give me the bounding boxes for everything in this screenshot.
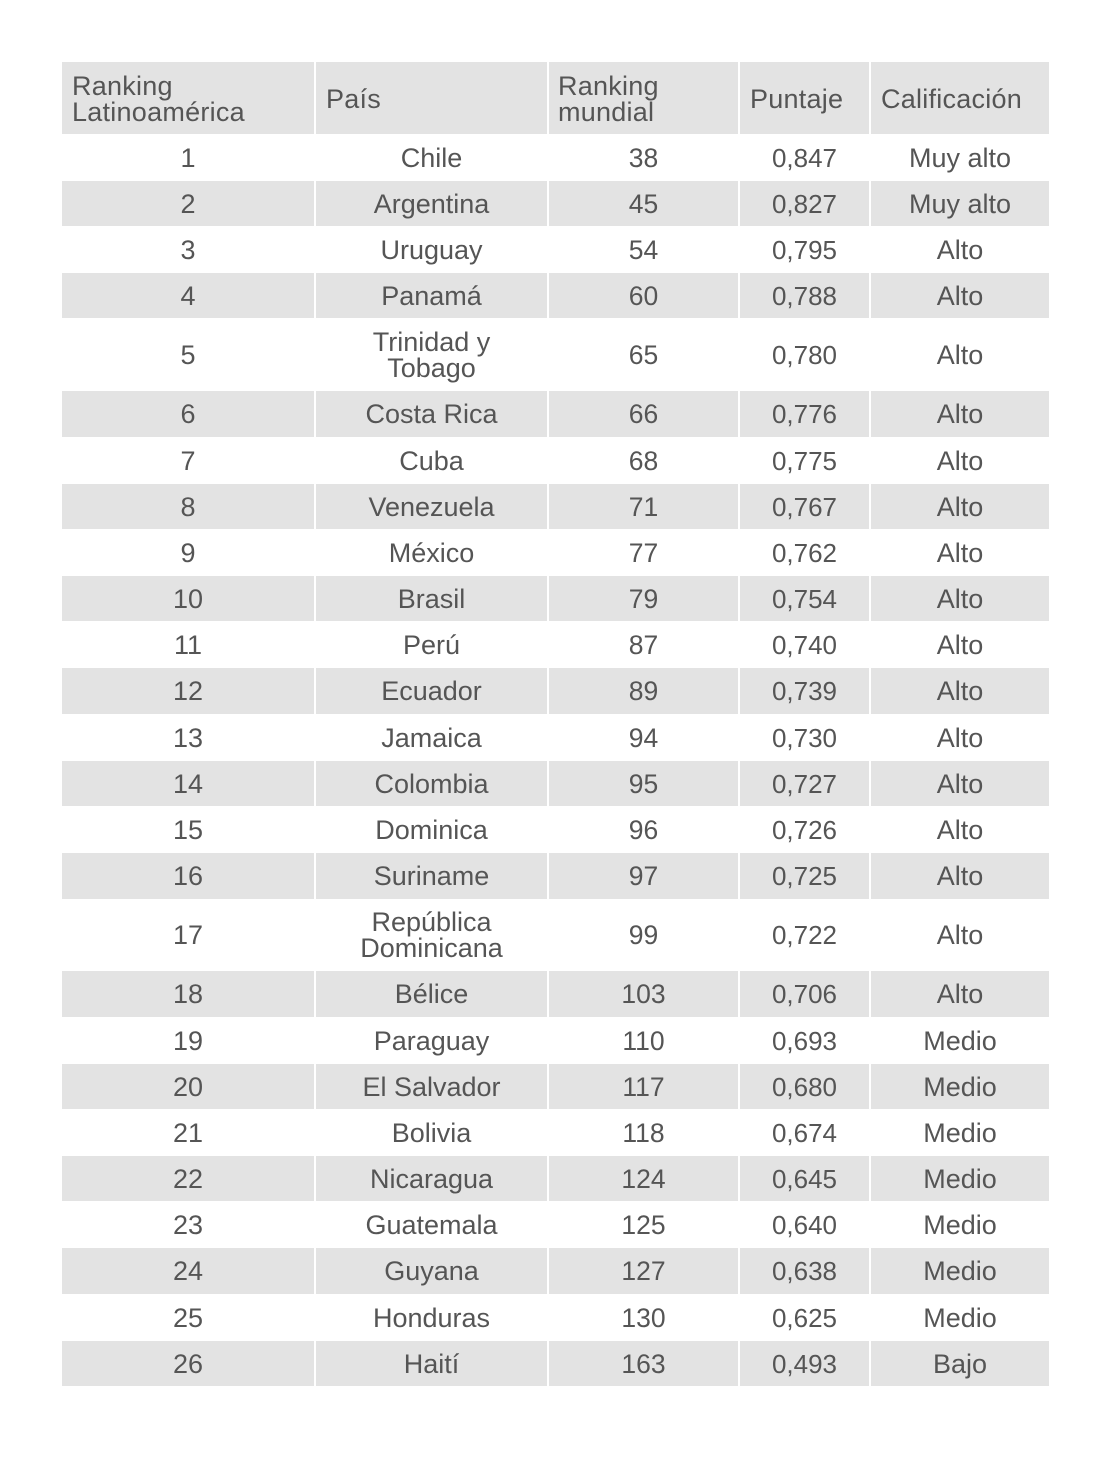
row 11: Perú: 0,740 (772, 630, 837, 660)
row 5: Trinidad y Tobago: 5 (180, 340, 196, 370)
row 22: Nicaragua (62, 1156, 1049, 1201)
row 18: Bélice: 0,706 (772, 979, 837, 1009)
row 20: El Salvador: 0,680 (772, 1072, 837, 1102)
row 9: México: 9 (180, 538, 196, 568)
row 18: Bélice: Bélice (395, 979, 468, 1009)
row 11: Perú: Alto (937, 630, 983, 660)
row 1: Chile: 0,847 (772, 143, 837, 173)
row 7: Cuba: Alto (937, 446, 983, 476)
row 11: Perú: 11 (174, 630, 202, 660)
row 6: Costa Rica: 0,776 (772, 399, 837, 429)
row 3: Uruguay: Alto (937, 235, 983, 265)
row 23: Guatemala: Guatemala (365, 1210, 498, 1240)
row 14: Colombia (62, 761, 1049, 806)
row 2: Argentina: Argentina (374, 188, 489, 218)
row 8: Venezuela: 0,767 (772, 492, 837, 522)
row 3: Uruguay (180, 235, 983, 265)
row 14: Colombia: 95 (629, 768, 658, 798)
row 15: Dominica: 0,726 (772, 814, 837, 844)
row 7: Cuba: 0,775 (772, 446, 837, 476)
row 24: Guyana: 127 (621, 1256, 666, 1286)
header row: Puntaje (750, 84, 843, 114)
row 17: República Dominicana: 0,722 (772, 920, 837, 950)
row 3: Uruguay: 3 (180, 235, 196, 265)
row 22: Nicaragua: Nicaragua (370, 1164, 493, 1194)
row 25: Honduras (173, 1302, 997, 1332)
row 7: Cuba: 7 (180, 446, 196, 476)
row 16: Suriname: Alto (937, 861, 983, 891)
row 25: Honduras: 130 (621, 1302, 666, 1332)
row 24: Guyana: Guyana (384, 1256, 479, 1286)
row 21: Bolivia: Medio (923, 1118, 997, 1148)
row 5: Trinidad y Tobago (180, 327, 983, 383)
row 17: República Dominicana: 17 (173, 920, 203, 950)
row 11: Perú: Perú (403, 630, 460, 660)
row 13: Jamaica: 0,730 (772, 722, 837, 752)
row 13: Jamaica: 94 (629, 722, 658, 752)
row 12: Ecuador: 89 (629, 676, 658, 706)
row 21: Bolivia: Bolivia (392, 1118, 471, 1148)
header row: Calificación (881, 84, 1022, 114)
row 25: Honduras: 25 (173, 1302, 203, 1332)
row 25: Honduras: Honduras (373, 1302, 490, 1332)
row 4: Panamá: 60 (629, 280, 658, 310)
row 4: Panamá: 0,788 (772, 280, 837, 310)
row 24: Guyana (62, 1248, 1049, 1294)
row 7: Cuba (180, 446, 983, 476)
row 3: Uruguay: Uruguay (380, 235, 483, 265)
row 2: Argentina: 0,827 (772, 188, 837, 218)
row 17: República Dominicana: 99 (629, 920, 658, 950)
row 6: Costa Rica: 66 (629, 399, 658, 429)
row 20: El Salvador: 117 (622, 1072, 665, 1102)
row 26: Haití: Bajo (933, 1348, 987, 1378)
row 9: México (180, 538, 983, 568)
row 20: El Salvador: Medio (923, 1072, 997, 1102)
row 1: Chile: Muy alto (909, 143, 1011, 173)
row 1: Chile (180, 143, 1011, 173)
row 5: Trinidad y Tobago: Alto (937, 340, 983, 370)
row 5: Trinidad y Tobago: 65 (629, 340, 658, 370)
row 7: Cuba: Cuba (399, 446, 464, 476)
row 23: Guatemala: 23 (173, 1210, 203, 1240)
row 24: Guyana: 0,638 (772, 1256, 837, 1286)
row 23: Guatemala: 0,640 (772, 1210, 837, 1240)
row 16: Suriname: Suriname (374, 861, 489, 891)
header row: Ranking (558, 70, 659, 100)
row 25: Honduras: Medio (923, 1302, 997, 1332)
row 9: México: México (389, 538, 474, 568)
row 26: Haití: 26 (173, 1348, 203, 1378)
row 6: Costa Rica: Alto (937, 399, 983, 429)
row 1: Chile: Chile (401, 143, 462, 173)
header row (62, 62, 1049, 134)
row 14: Colombia: 14 (173, 768, 203, 798)
row 15: Dominica: Alto (937, 814, 983, 844)
row 6: Costa Rica (62, 391, 1049, 437)
row 1: Chile: 1 (180, 143, 196, 173)
row 15: Dominica: 96 (629, 814, 658, 844)
header row: País (326, 84, 381, 114)
row 10: Brasil: 79 (629, 584, 658, 614)
row 3: Uruguay: 0,795 (772, 235, 837, 265)
header row: Latinoamérica (72, 96, 245, 126)
row 16: Suriname: 0,725 (772, 861, 837, 891)
row 10: Brasil: Brasil (398, 584, 465, 614)
row 5: Trinidad y Tobago: Trinidad y (373, 327, 490, 357)
row 13: Jamaica (173, 722, 983, 752)
row 17: República Dominicana: Alto (937, 920, 983, 950)
row 16: Suriname: 97 (629, 861, 658, 891)
row 14: Colombia: Alto (937, 768, 983, 798)
row 2: Argentina: 45 (629, 188, 658, 218)
header row: mundial (558, 96, 654, 126)
row 8: Venezuela: Venezuela (368, 492, 495, 522)
row 19: Paraguay: Paraguay (374, 1026, 489, 1056)
row 23: Guatemala (173, 1210, 997, 1240)
row 19: Paraguay: 0,693 (772, 1026, 837, 1056)
row 19: Paraguay (173, 1026, 997, 1056)
row 16: Suriname: 16 (173, 861, 203, 891)
row 11: Perú (174, 630, 983, 660)
row 25: Honduras: 0,625 (772, 1302, 837, 1332)
row 18: Bélice: Alto (937, 979, 983, 1009)
row 22: Nicaragua: 0,645 (772, 1164, 837, 1194)
row 20: El Salvador (62, 1064, 1049, 1109)
row 13: Jamaica: Alto (937, 722, 983, 752)
row 12: Ecuador: 12 (173, 676, 203, 706)
row 8: Venezuela: 71 (629, 492, 658, 522)
row 14: Colombia: Colombia (374, 768, 489, 798)
row 12: Ecuador (62, 668, 1049, 714)
row 22: Nicaragua: 22 (173, 1164, 203, 1194)
row 26: Haití: 163 (621, 1348, 666, 1378)
row 10: Brasil: Alto (937, 584, 983, 614)
row 20: El Salvador: 20 (173, 1072, 203, 1102)
row 19: Paraguay: 110 (622, 1026, 665, 1056)
row 26: Haití: Haití (404, 1348, 459, 1378)
row 18: Bélice: 18 (173, 979, 203, 1009)
row 5: Trinidad y Tobago: 0,780 (772, 340, 837, 370)
row 21: Bolivia (173, 1118, 997, 1148)
row 2: Argentina: Muy alto (909, 188, 1011, 218)
row 9: México: 77 (629, 538, 658, 568)
row 17: República Dominicana: República (371, 907, 492, 937)
row 15: Dominica: 15 (173, 814, 203, 844)
row 8: Venezuela: 8 (180, 492, 196, 522)
row 10: Brasil: 10 (173, 584, 203, 614)
row 24: Guyana: Medio (923, 1256, 997, 1286)
row 8: Venezuela (62, 484, 1049, 529)
row 16: Suriname (62, 853, 1049, 899)
row 1: Chile: 38 (629, 143, 658, 173)
row 4: Panamá (62, 273, 1049, 318)
row 15: Dominica (173, 814, 983, 844)
row 19: Paraguay: 19 (173, 1026, 203, 1056)
row 21: Bolivia: 21 (173, 1118, 203, 1148)
row 14: Colombia: 0,727 (772, 768, 837, 798)
row 26: Haití (62, 1341, 1049, 1386)
row 4: Panamá: Panamá (381, 280, 482, 310)
row 9: México: Alto (937, 538, 983, 568)
row 6: Costa Rica: 6 (180, 399, 196, 429)
row 4: Panamá: Alto (937, 280, 983, 310)
row 9: México: 0,762 (772, 538, 837, 568)
row 23: Guatemala: 125 (621, 1210, 666, 1240)
row 22: Nicaragua: 124 (621, 1164, 666, 1194)
row 17: República Dominicana: Dominicana (360, 933, 503, 963)
row 2: Argentina (62, 181, 1049, 226)
row 3: Uruguay: 54 (629, 235, 658, 265)
row 22: Nicaragua: Medio (923, 1164, 997, 1194)
row 12: Ecuador: Alto (937, 676, 983, 706)
row 17: República Dominicana (173, 907, 983, 963)
row 11: Perú: 87 (629, 630, 658, 660)
row 24: Guyana: 24 (173, 1256, 203, 1286)
row 21: Bolivia: 118 (622, 1118, 665, 1148)
row 6: Costa Rica: Costa Rica (365, 399, 498, 429)
row 7: Cuba: 68 (629, 446, 658, 476)
row 26: Haití: 0,493 (772, 1348, 837, 1378)
row 8: Venezuela: Alto (937, 492, 983, 522)
row 18: Bélice (62, 971, 1049, 1017)
row 18: Bélice: 103 (621, 979, 666, 1009)
row 10: Brasil (62, 576, 1049, 621)
row 13: Jamaica: 13 (173, 722, 203, 752)
row 12: Ecuador: Ecuador (381, 676, 482, 706)
header row: Ranking (72, 70, 173, 100)
row 23: Guatemala: Medio (923, 1210, 997, 1240)
row 10: Brasil: 0,754 (772, 584, 837, 614)
row 20: El Salvador: El Salvador (362, 1072, 501, 1102)
row 15: Dominica: Dominica (375, 814, 488, 844)
row 19: Paraguay: Medio (923, 1026, 997, 1056)
row 13: Jamaica: Jamaica (381, 722, 482, 752)
row 4: Panamá: 4 (180, 280, 196, 310)
row 2: Argentina: 2 (180, 188, 196, 218)
row 21: Bolivia: 0,674 (772, 1118, 837, 1148)
row 12: Ecuador: 0,739 (772, 676, 837, 706)
row 5: Trinidad y Tobago: Tobago (387, 353, 476, 383)
